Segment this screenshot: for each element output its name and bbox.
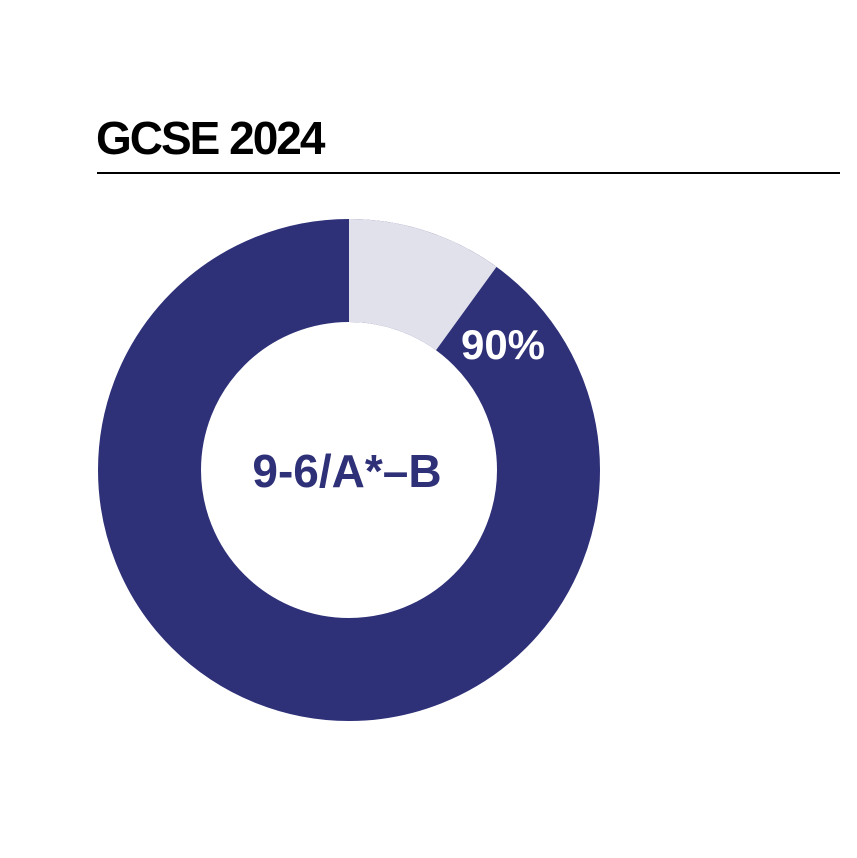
center label: 9-6/A*–B — [252, 445, 442, 497]
title: GCSE 2024 — [96, 112, 323, 164]
segment: 90% dark — [150, 270, 548, 670]
segment: 10% light — [349, 219, 496, 350]
label: 90%: 90% — [461, 321, 545, 368]
